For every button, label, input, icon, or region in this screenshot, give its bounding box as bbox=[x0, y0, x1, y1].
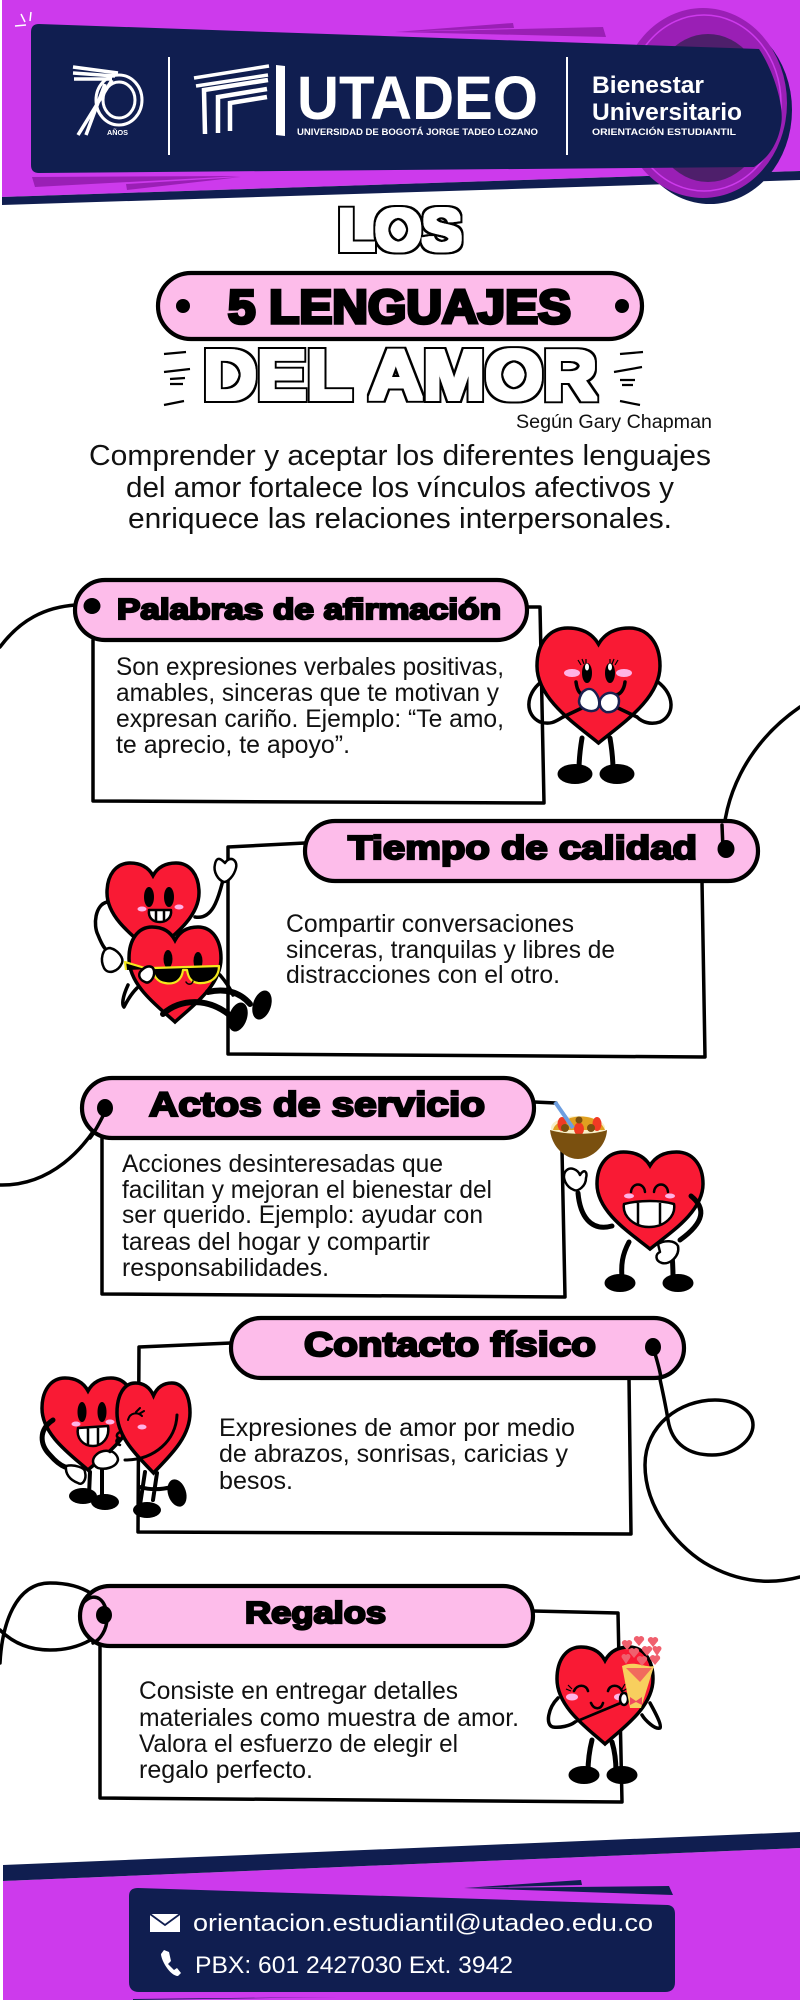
text: tiempo: distracciones con el otro. bbox=[286, 961, 560, 989]
text: tiempo bbox=[286, 910, 615, 989]
text: palabras: expresan cariño. Ejemplo: “Te amo, bbox=[116, 705, 504, 733]
heading: Bienestar Universitario: ORIENTACIÓN ESTUDIANTIL bbox=[592, 126, 736, 138]
panel: palabras de afirmación: Palabras de afirmación bbox=[117, 594, 501, 626]
icon: phone bbox=[161, 1950, 181, 1976]
icon: two hearts kissing bbox=[42, 1378, 190, 1518]
icon: fruit bowl bbox=[550, 1102, 607, 1159]
panel: tiempo de calidad: Tiempo de calidad bbox=[348, 829, 697, 866]
icon: shy heart bbox=[529, 628, 671, 784]
logo: UTADEO: UNIVERSIDAD DE BOGOTÁ JORGE TADEO LOZANO bbox=[297, 127, 538, 138]
icon: envelope bbox=[150, 1914, 180, 1932]
text: actos: tareas del hogar y compartir bbox=[122, 1228, 430, 1256]
title: LOS bbox=[338, 198, 462, 263]
icon: two hearts with sunglasses bbox=[95, 859, 275, 1034]
panel: tiempo de calidad bbox=[228, 707, 800, 1057]
text: contacto: Expresiones de amor por medio bbox=[219, 1414, 575, 1442]
intro text bbox=[89, 440, 711, 535]
text: actos: ser querido. Ejemplo: ayudar con bbox=[122, 1201, 483, 1229]
heading: Bienestar Universitario: Universitario bbox=[592, 99, 742, 126]
contact: email: orientacion.estudiantil@utadeo.edu.co bbox=[193, 1910, 653, 1937]
panel: regalos: Regalos bbox=[245, 1595, 386, 1630]
text: actos: responsabilidades. bbox=[122, 1254, 329, 1282]
panel: regalos bbox=[0, 1583, 622, 1802]
text: palabras: te aprecio, te apoyo”. bbox=[116, 731, 350, 759]
author credit: Según Gary Chapman bbox=[516, 412, 712, 433]
icon: heart with bouquet bbox=[548, 1636, 661, 1784]
text: regalos: materiales como muestra de amor. bbox=[139, 1704, 519, 1732]
heading: Bienestar Universitario: Bienestar bbox=[592, 72, 704, 99]
text: actos bbox=[122, 1150, 492, 1282]
panel: actos de servicio: Actos de servicio bbox=[149, 1086, 485, 1124]
panel: contacto físico bbox=[138, 1318, 800, 1581]
text: contacto: de abrazos, sonrisas, caricias y bbox=[219, 1440, 568, 1468]
text: tiempo: Compartir conversaciones bbox=[286, 910, 574, 938]
text: tiempo: sinceras, tranquilas y libres de bbox=[286, 936, 615, 964]
intro text: del amor fortalece los vínculos afectivos y bbox=[126, 472, 675, 504]
text: actos: facilitan y mejoran el bienestar del bbox=[122, 1176, 492, 1204]
contact: phone: PBX: 601 2427030 Ext. 3942 bbox=[195, 1952, 513, 1979]
text: regalos bbox=[139, 1677, 519, 1784]
header banner bbox=[2, 0, 800, 205]
panel: actos de servicio bbox=[0, 1078, 565, 1297]
logo: 70 años: AÑOS bbox=[107, 128, 128, 137]
heading: Bienestar Universitario bbox=[592, 72, 742, 138]
text: palabras bbox=[116, 653, 504, 759]
text: regalos: regalo perfecto. bbox=[139, 1756, 313, 1784]
text: regalos: Valora el esfuerzo de elegir el bbox=[139, 1730, 458, 1758]
text: palabras: amables, sinceras que te motivan y bbox=[116, 679, 499, 707]
title: DEL AMOR bbox=[203, 336, 597, 414]
footer band bbox=[3, 1832, 800, 2000]
text: palabras: Son expresiones verbales positivas, bbox=[116, 653, 504, 681]
text: contacto bbox=[219, 1414, 575, 1495]
text: contacto: besos. bbox=[219, 1467, 293, 1495]
intro text: enriquece las relaciones interpersonales. bbox=[128, 503, 672, 535]
title: 5 LENGUAJES bbox=[228, 280, 571, 333]
icon: bouquet bbox=[621, 1636, 661, 1708]
panel: palabras de afirmación bbox=[0, 580, 544, 803]
panel: contacto físico: Contacto físico bbox=[304, 1326, 596, 1364]
logo: UTADEO bbox=[194, 64, 538, 138]
text: actos: Acciones desinteresadas que bbox=[122, 1150, 443, 1178]
text: regalos: Consiste en entregar detalles bbox=[139, 1677, 458, 1705]
logo: 70 años bbox=[73, 67, 142, 137]
logo: UTADEO: UTADEO bbox=[297, 64, 538, 132]
intro text: Comprender y aceptar los diferentes lenguajes bbox=[89, 440, 711, 472]
title bbox=[158, 198, 643, 414]
icon: happy heart with bowl bbox=[550, 1102, 703, 1292]
